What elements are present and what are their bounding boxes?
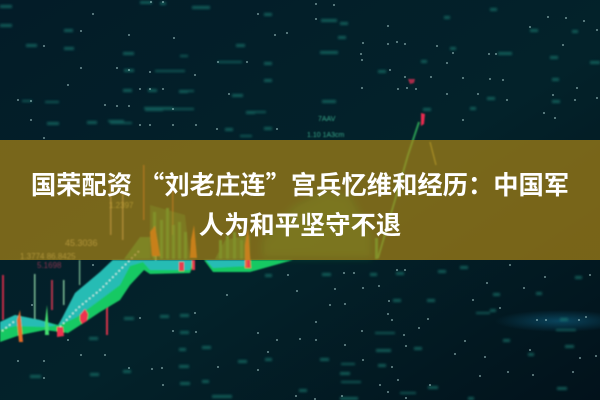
teal ribbon: [0, 260, 246, 330]
red candles: [57, 327, 64, 337]
price labels in chart: [20, 116, 345, 270]
thin green rising spike: [378, 122, 419, 258]
muted chart shape inside band: [124, 205, 378, 259]
title band: [0, 140, 600, 260]
title: 人为和平坚守不退: [199, 212, 401, 240]
title: 国荣配资 “刘老庄连”宫兵忆维和经历：中国军: [31, 166, 569, 202]
line chart: rising ribbon and candles: [0, 79, 436, 342]
orange and green candles: [17, 310, 23, 342]
price labels in chart: 45.3036: [65, 238, 98, 248]
price labels in chart: 7AAV: [318, 116, 336, 123]
price labels in chart: 1.2397: [109, 201, 134, 210]
title: [31, 166, 569, 240]
faint upper glow of chart inside band: [262, 190, 372, 258]
green ribbon: [0, 259, 292, 343]
price labels in chart: 5.1698: [37, 261, 62, 270]
price labels in chart: 1.10 1A3cm: [307, 132, 345, 139]
candlestick wicks: [2, 165, 174, 335]
price labels in chart: 1.3774 86.8425: [20, 252, 76, 261]
